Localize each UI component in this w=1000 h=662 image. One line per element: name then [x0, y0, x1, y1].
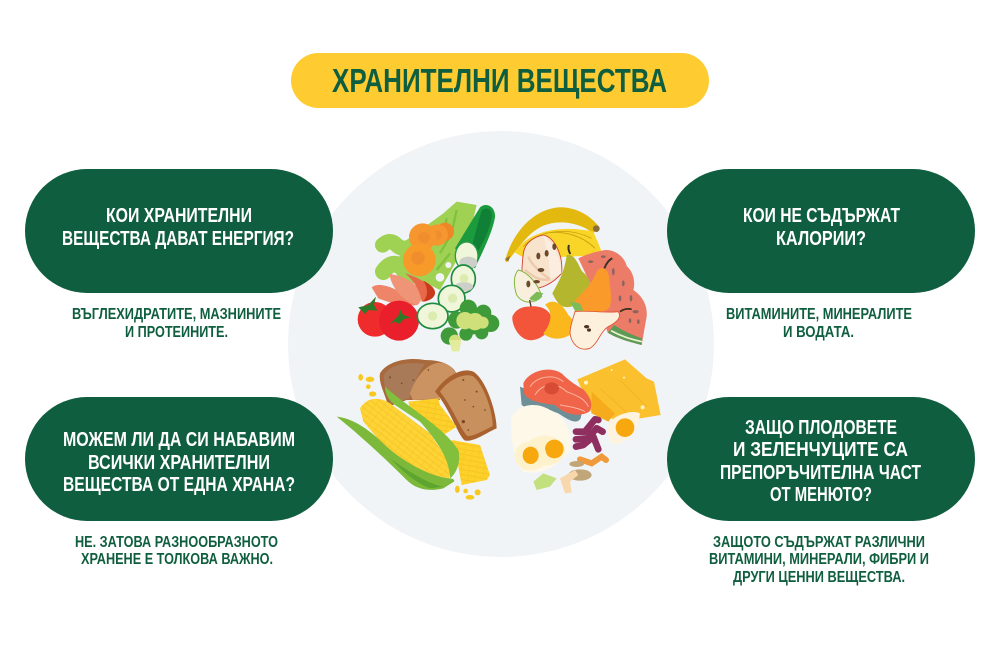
panel: single food question: ВЕЩЕСТВА ОТ ЕДНА ХРАНА? [63, 474, 295, 496]
answer: fruit and vegetables: ВИТАМИНИ, МИНЕРАЛИ, ФИБРИ И [709, 551, 929, 568]
answer: calories [726, 306, 912, 341]
answer: energy: И ПРОТЕИНИТЕ. [125, 324, 228, 341]
central background circle [288, 131, 714, 557]
answer: single food: НЕ. ЗАТОВА РАЗНООБРАЗНОТО [75, 534, 278, 551]
panel: fruit and vegetables question: ПРЕПОРЪЧИТЕЛНА ЧАСТ [720, 462, 921, 484]
panel: calories question: КОИ НЕ СЪДЪРЖАТ [743, 205, 900, 227]
panel: energy question: КОИ ХРАНИТЕЛНИ [106, 205, 252, 227]
answer: fruit and vegetables: ЗАЩОТО СЪДЪРЖАТ РАЗЛИЧНИ [713, 534, 925, 551]
panel: energy question [25, 169, 333, 293]
icon: grains [337, 359, 497, 500]
panel: fruit and vegetables question: ОТ МЕНЮТО? [770, 484, 872, 506]
panel: single food question [25, 397, 333, 521]
answer: single food [75, 534, 278, 568]
answer: energy [72, 306, 281, 341]
answer: fruit and vegetables [709, 534, 929, 586]
panel: single food question: МОЖЕМ ЛИ ДА СИ НАБАВИМ [63, 429, 295, 451]
title banner [291, 53, 709, 108]
panel: fruit and vegetables question: И ЗЕЛЕНЧУЦИТЕ СА [733, 439, 908, 461]
panel: single food question: ВСИЧКИ ХРАНИТЕЛНИ [88, 452, 270, 474]
panel: calories question: КАЛОРИИ? [776, 228, 866, 250]
panel: energy question: ВЕЩЕСТВА ДАВАТ ЕНЕРГИЯ? [62, 228, 294, 250]
answer: fruit and vegetables: ДРУГИ ЦЕННИ ВЕЩЕСТВА. [733, 569, 905, 586]
answer: calories: ВИТАМИНИТЕ, МИНЕРАЛИТЕ [726, 306, 912, 323]
icon: vegetables [358, 202, 499, 351]
answer: single food: ХРАНЕНЕ Е ТОЛКОВА ВАЖНО. [81, 551, 273, 568]
icon: fruits [505, 207, 647, 349]
answer: calories: И ВОДАТА. [783, 324, 854, 341]
title banner: ХРАНИТЕЛНИ ВЕЩЕСТВА [332, 62, 667, 99]
panel: fruit and vegetables question [667, 397, 975, 521]
answer: energy: ВЪГЛЕХИДРАТИТЕ, МАЗНИНИТЕ [72, 306, 281, 323]
panel: calories question [667, 169, 975, 293]
icon: proteins [511, 359, 661, 493]
panel: fruit and vegetables question: ЗАЩО ПЛОДОВЕТЕ [745, 417, 897, 439]
